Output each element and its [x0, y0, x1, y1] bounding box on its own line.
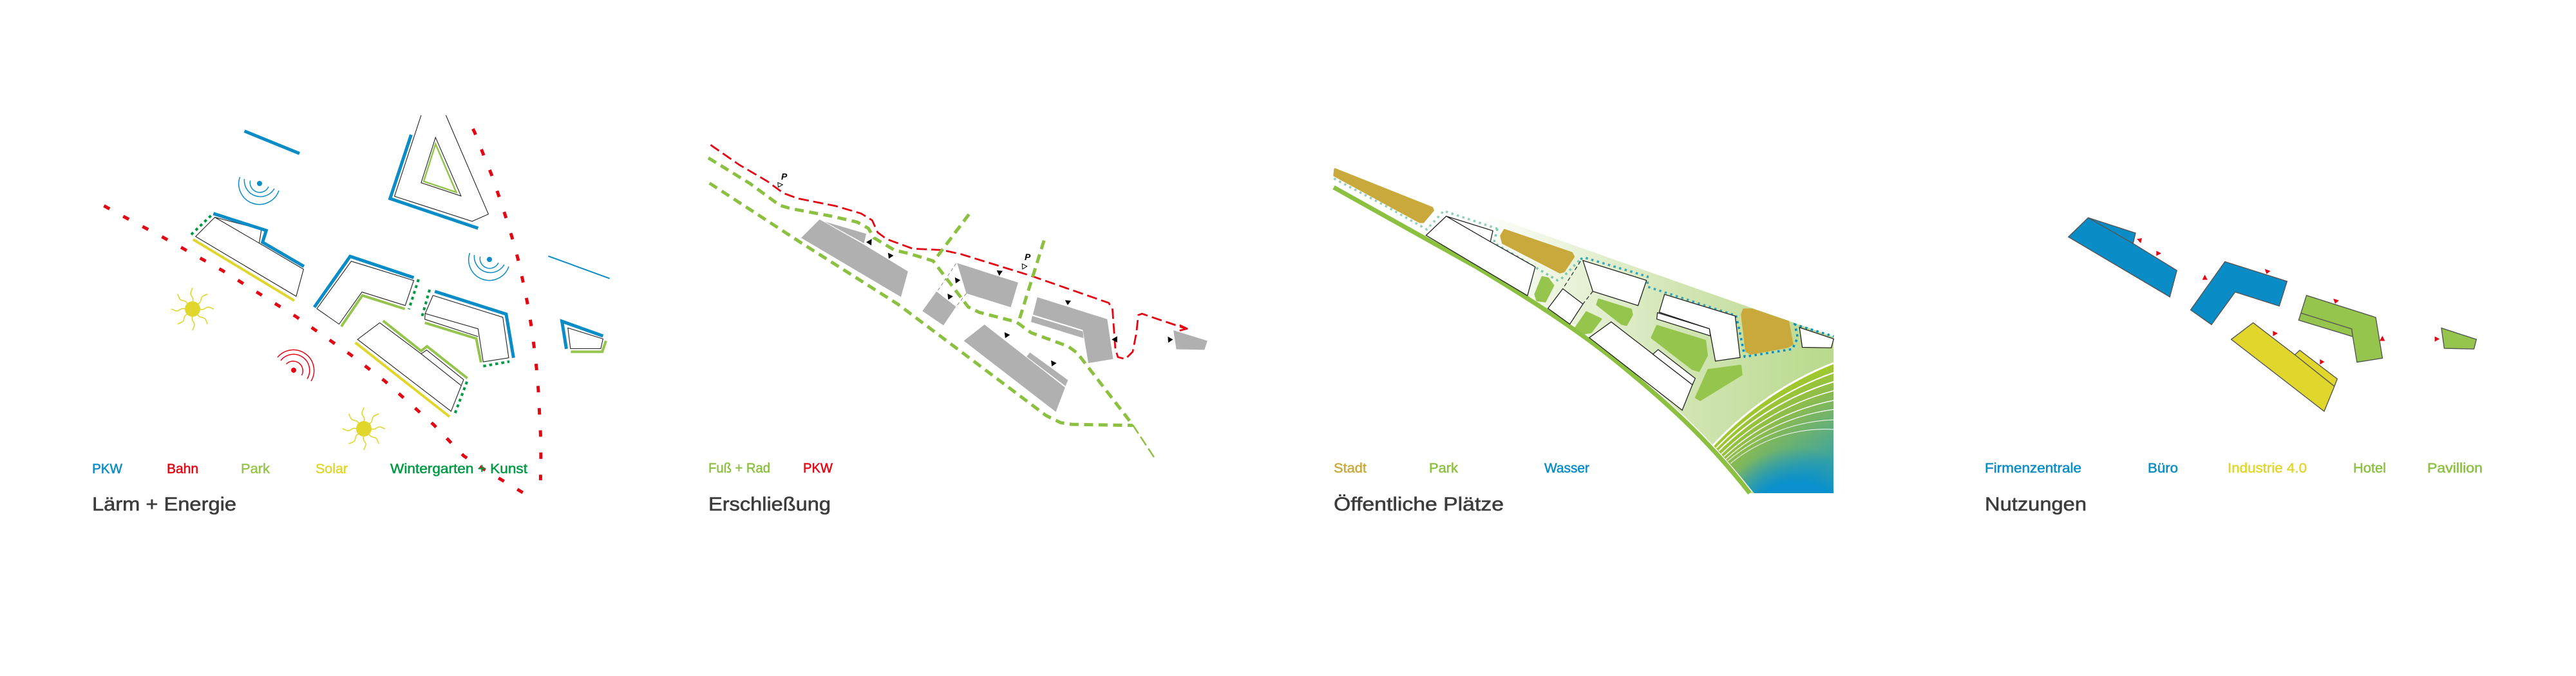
promenade dotted path	[1334, 178, 1833, 357]
building: Industrie 4.0	[2231, 323, 2337, 411]
building: pavilion	[562, 321, 606, 352]
legend: Büro	[2148, 461, 2178, 476]
diagram: building uses	[2069, 218, 2476, 411]
legend: Park	[1429, 461, 1459, 476]
green edge band	[1334, 187, 1750, 493]
legend: Hotel	[2353, 461, 2386, 476]
diagram: noise and energy site plan	[104, 115, 610, 493]
legend: PKW	[92, 462, 122, 476]
heading: Nutzungen	[1985, 494, 2087, 515]
legend: Wintergarten + Kunst	[390, 462, 527, 476]
legend: Firmenzentrale	[1985, 461, 2081, 476]
green park patches	[1535, 277, 1741, 400]
railway lines (Bahn)	[104, 115, 541, 493]
legend	[1985, 461, 2483, 476]
white buildings	[1426, 216, 1833, 410]
building: Hotel	[2298, 296, 2382, 362]
icon: road noise waves	[239, 177, 279, 205]
legend	[1334, 461, 1589, 476]
icon: road noise waves	[469, 253, 509, 281]
legend: Wasser	[1544, 461, 1589, 476]
heading: Öffentliche Plätze	[1334, 494, 1504, 515]
building: Firmenzentrale	[2069, 218, 2177, 297]
water basin with terraces (Wasser)	[1713, 363, 1833, 493]
building: Pavillion	[2441, 328, 2476, 349]
legend: Pavillion	[2427, 461, 2483, 476]
thin passage lines	[937, 263, 967, 306]
building: west block	[191, 214, 304, 301]
icon: rail noise waves	[278, 350, 314, 381]
urban squares (Stadt)	[1334, 169, 1792, 353]
legend: Solar	[316, 462, 348, 476]
park ground	[1426, 197, 1833, 493]
building: east block	[421, 290, 513, 366]
pedestrian and cycle routes (Fuß + Rad)	[708, 158, 1154, 457]
legend: Fuß + Rad	[708, 461, 770, 476]
road segments (PKW)	[245, 131, 610, 279]
label: parking P: P	[781, 171, 788, 182]
label: parking P: P	[1025, 252, 1031, 262]
building: south block	[355, 321, 468, 417]
passage dashes	[1563, 261, 1593, 304]
entrance arrows	[2137, 238, 2439, 364]
panel: Öffentliche Plätze	[1334, 169, 1833, 515]
legend: Industrie 4.0	[2228, 461, 2307, 476]
icon: sun	[171, 288, 214, 330]
parking markers	[778, 183, 1027, 269]
legend: Bahn	[167, 462, 198, 476]
car route (PKW)	[710, 145, 1187, 359]
heading: Lärm + Energie	[92, 494, 236, 515]
diagram: access routes site plan	[708, 145, 1208, 457]
panel: Erschließung	[708, 145, 1208, 515]
grey buildings	[801, 220, 1208, 412]
panel: Lärm + Energie	[92, 115, 610, 515]
diagram: public spaces plan	[1334, 169, 1833, 410]
building: L-shaped block	[314, 256, 419, 326]
legend: Park	[241, 462, 270, 476]
legend	[92, 462, 527, 476]
building: Büro	[2191, 261, 2287, 324]
entrance arrows	[866, 239, 1173, 366]
icon: sun	[343, 408, 385, 450]
legend: PKW	[803, 461, 833, 476]
building: north triangle	[390, 115, 488, 228]
legend	[708, 461, 833, 476]
panel: Nutzungen	[1985, 218, 2483, 515]
legend: Stadt	[1334, 461, 1367, 476]
heading: Erschließung	[708, 494, 831, 515]
